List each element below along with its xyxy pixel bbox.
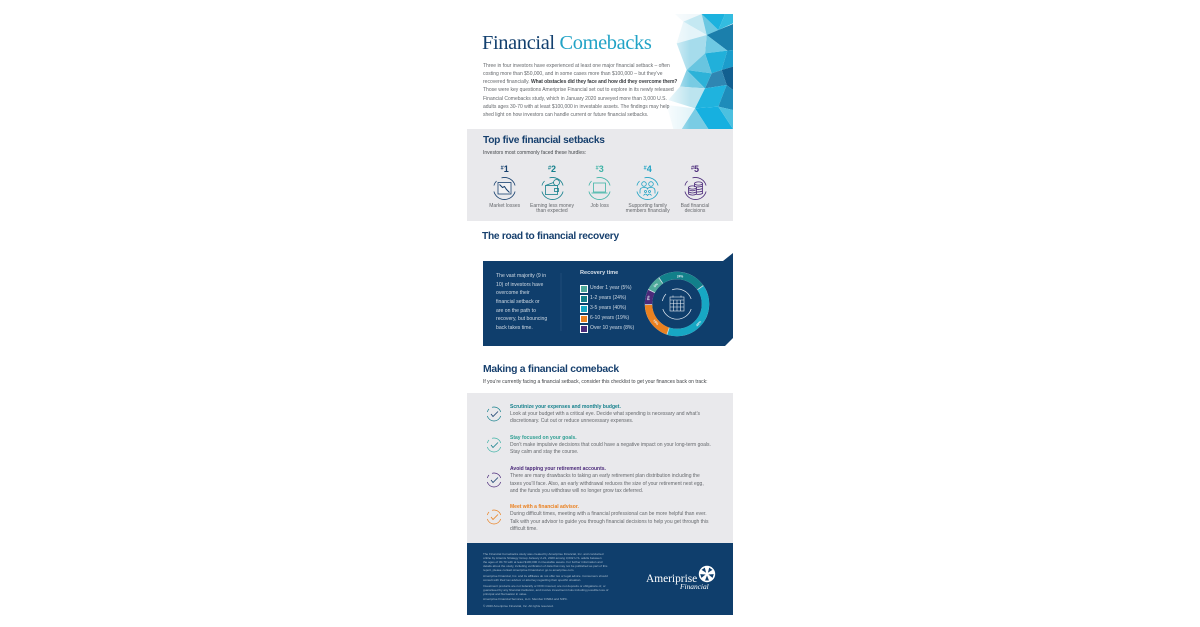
label: earning less money <box>530 202 574 214</box>
recovery text <box>496 273 547 331</box>
disclosure 2: consult with their tax advisor or attorney regarding their specific situation. <box>483 578 581 582</box>
label: bad decisions: decisions <box>685 208 705 214</box>
legend item: 1-2 years <box>580 295 626 303</box>
checklist item 4 <box>510 504 708 532</box>
icon: supporting family <box>636 177 658 200</box>
checklist item 2: Stay calm and stay the course. <box>510 449 578 455</box>
donut chart: 8% <box>646 295 650 300</box>
checklist item 2: Stay focused on your goals. <box>510 434 577 440</box>
intro text: costing more than $50,000, and in some cases more than $100,000 – but they’ve <box>483 71 663 77</box>
subheading: hurdles: Investors most commonly faced these hurdles: <box>483 150 586 156</box>
icon: earning less money <box>542 177 564 200</box>
checklist item 4: Meet with a financial advisor. <box>510 504 579 510</box>
icon: job loss <box>588 177 610 200</box>
legend item: 1-2 years: 1-2 years (24%) <box>590 295 626 301</box>
recovery text: overcome their <box>496 290 530 296</box>
intro text: recovered financially. What obstacles did they face and how did they overcome them? <box>483 79 677 85</box>
subheading: checklist intro: If you’re currently facing a financial setback, consider this checklist to get your finances back on track: <box>483 379 708 385</box>
disclosure 3: Investment products are not federally or FDIC insured, are not deposits or obligations of, or <box>483 584 606 588</box>
icon: check 2 <box>487 438 501 452</box>
intro text: adults ages 30-70 with at least $100,000 in investable assets. The findings may help <box>483 104 669 110</box>
intro text: Financial Comebacks study, which in January 2020 surveyed more than 3,000 U.S. <box>483 96 667 102</box>
label: job loss: Job loss <box>591 202 609 208</box>
checklist item 3: taxes you’ll face. Also, an early withdrawal reduces the size of your retirement nest egg, <box>510 481 704 487</box>
icon: check 3 <box>487 472 501 488</box>
intro text: shed light on how investors can handle current or future financial setbacks. <box>483 112 648 118</box>
icon: check 4 <box>487 510 501 524</box>
legend item: over 10 years: Over 10 years (8%) <box>590 325 634 331</box>
disclosure 2: Ameriprise Financial, Inc. and its affiliates do not offer tax or legal advice. Consumers should <box>483 574 608 578</box>
disclosure 3 <box>483 584 608 596</box>
label: supporting family <box>626 202 670 214</box>
disclosure 3: guaranteed by any financial institution, and involve investment risks including possible loss of <box>483 588 608 592</box>
panel: footer <box>467 543 733 615</box>
checklist item 1 <box>510 404 700 424</box>
logo sub-wordmark: Financial <box>680 582 709 591</box>
donut chart: 24% <box>677 274 683 278</box>
legend item: under 1 year <box>580 285 632 293</box>
label: supporting family: Supporting family <box>628 202 667 208</box>
label: bad decisions <box>681 202 709 214</box>
donut chart <box>644 272 710 336</box>
label: earning less money: Earning less money <box>530 202 574 208</box>
disclosure 1: online by Artemis Strategy Group January 2-21, 2020 among 3,032 U.S. adults between <box>483 556 602 560</box>
label: earning less money: than expected <box>536 208 568 214</box>
checklist item 3: There are many drawbacks to taking an early retirement plan distribution including the <box>510 473 700 479</box>
logo emblem <box>698 566 716 582</box>
legend item: 6-10 years <box>580 315 629 323</box>
recovery text: are on the path to <box>496 308 536 314</box>
legend title: Recovery time <box>580 270 618 276</box>
icon: check 1 <box>487 406 501 422</box>
panel: recovery navy <box>483 253 733 346</box>
checklist item 1: discretionary. Cut out or reduce unnecessary expenses. <box>510 418 633 424</box>
heading: road to recovery: The road to financial recovery <box>482 231 619 242</box>
logo wordmark: Ameriprise <box>646 572 697 584</box>
rank 3: #3 <box>596 164 604 174</box>
disclosure 1: report, please contact Ameriprise Financial or go to ameriprise.com. <box>483 568 574 572</box>
label: supporting family: members financially <box>626 208 670 214</box>
icon: market losses <box>494 177 516 200</box>
copyright: © 2020 Ameriprise Financial, Inc. All rights reserved. <box>483 604 554 608</box>
disclosure 1: the ages of 30-70 with at least $100,000 in investable assets. For further information and <box>483 560 602 564</box>
checklist item 1: Look at your budget with a critical eye. Decide what spending is necessary and what’s <box>510 411 700 417</box>
checklist item 2 <box>510 434 711 455</box>
recovery text: recovery, but bouncing <box>496 316 547 322</box>
checklist item 3: and the funds you withdraw will no longer grow tax deferred. <box>510 488 643 494</box>
disclosure 1: details about the study, including verification of data that may not be published as part of this <box>483 564 607 568</box>
checklist item 1: Scrutinize your expenses and monthly budget. <box>510 404 621 410</box>
disclosure 1: The Financial Comebacks study was created by Ameriprise Financial, Inc. and conducted <box>483 552 603 556</box>
rank 2: #2 <box>548 164 556 174</box>
label: bad decisions: Bad financial <box>681 202 709 208</box>
intro text: Those were key questions Ameriprise Financial set out to explore in its newly released <box>483 87 674 93</box>
checklist item 3 <box>510 466 704 494</box>
panel: top five financial setbacks <box>467 129 733 221</box>
intro text: Three in four investors have experienced at least one major financial setback – often <box>483 62 670 68</box>
checklist item 4: During difficult times, meeting with a financial professional can be more helpful than ever. <box>510 511 707 517</box>
disclosure 4: Ameriprise Financial Services, LLC. Member FINRA and SIPC. <box>483 597 568 601</box>
panel: header <box>467 14 733 129</box>
heading: top five: Top five financial setbacks <box>483 135 605 146</box>
panel: checklist <box>467 393 733 543</box>
donut chart: 19% <box>652 318 659 326</box>
legend item: over 10 years <box>580 325 634 333</box>
rank 5: #5 <box>691 164 699 174</box>
legend item: 3-5 years: 3-5 years (40%) <box>590 305 626 311</box>
legend item: 3-5 years <box>580 305 626 313</box>
recovery text: back takes time. <box>496 325 533 331</box>
checklist item 3: Avoid tapping your retirement accounts. <box>510 466 606 472</box>
rank 1: #1 <box>501 164 509 174</box>
recovery text: The vast majority (9 in <box>496 273 546 279</box>
legend <box>580 285 634 333</box>
rank 4: #4 <box>644 164 652 174</box>
title: Financial Comebacks <box>482 32 651 54</box>
checklist item 2: Don’t make impulsive decisions that could have a negative impact on your long-term goals. <box>510 442 711 448</box>
recovery text: 10) of investors have <box>496 282 543 288</box>
legend item: 6-10 years: 6-10 years (19%) <box>590 315 629 321</box>
disclosure 2 <box>483 574 608 582</box>
checklist item 4: Talk with your advisor to guide you through financial decisions to help you get through this <box>510 519 708 525</box>
icon: bad financial decisions <box>684 177 706 200</box>
checklist item 4: difficult time. <box>510 526 538 532</box>
donut chart: 40% <box>695 319 702 327</box>
donut chart: 5% <box>653 282 659 288</box>
legend item: under 1 year: Under 1 year (5%) <box>590 285 632 291</box>
decorative polygon mosaic <box>668 14 733 129</box>
heading: making a comeback: Making a financial comeback <box>483 364 619 375</box>
recovery text: financial setback or <box>496 299 540 305</box>
disclosure 1 <box>483 552 608 572</box>
disclosure 3: principal and fluctuation in value. <box>483 592 527 596</box>
label: market losses: Market losses <box>489 202 520 208</box>
intro text <box>483 62 677 118</box>
